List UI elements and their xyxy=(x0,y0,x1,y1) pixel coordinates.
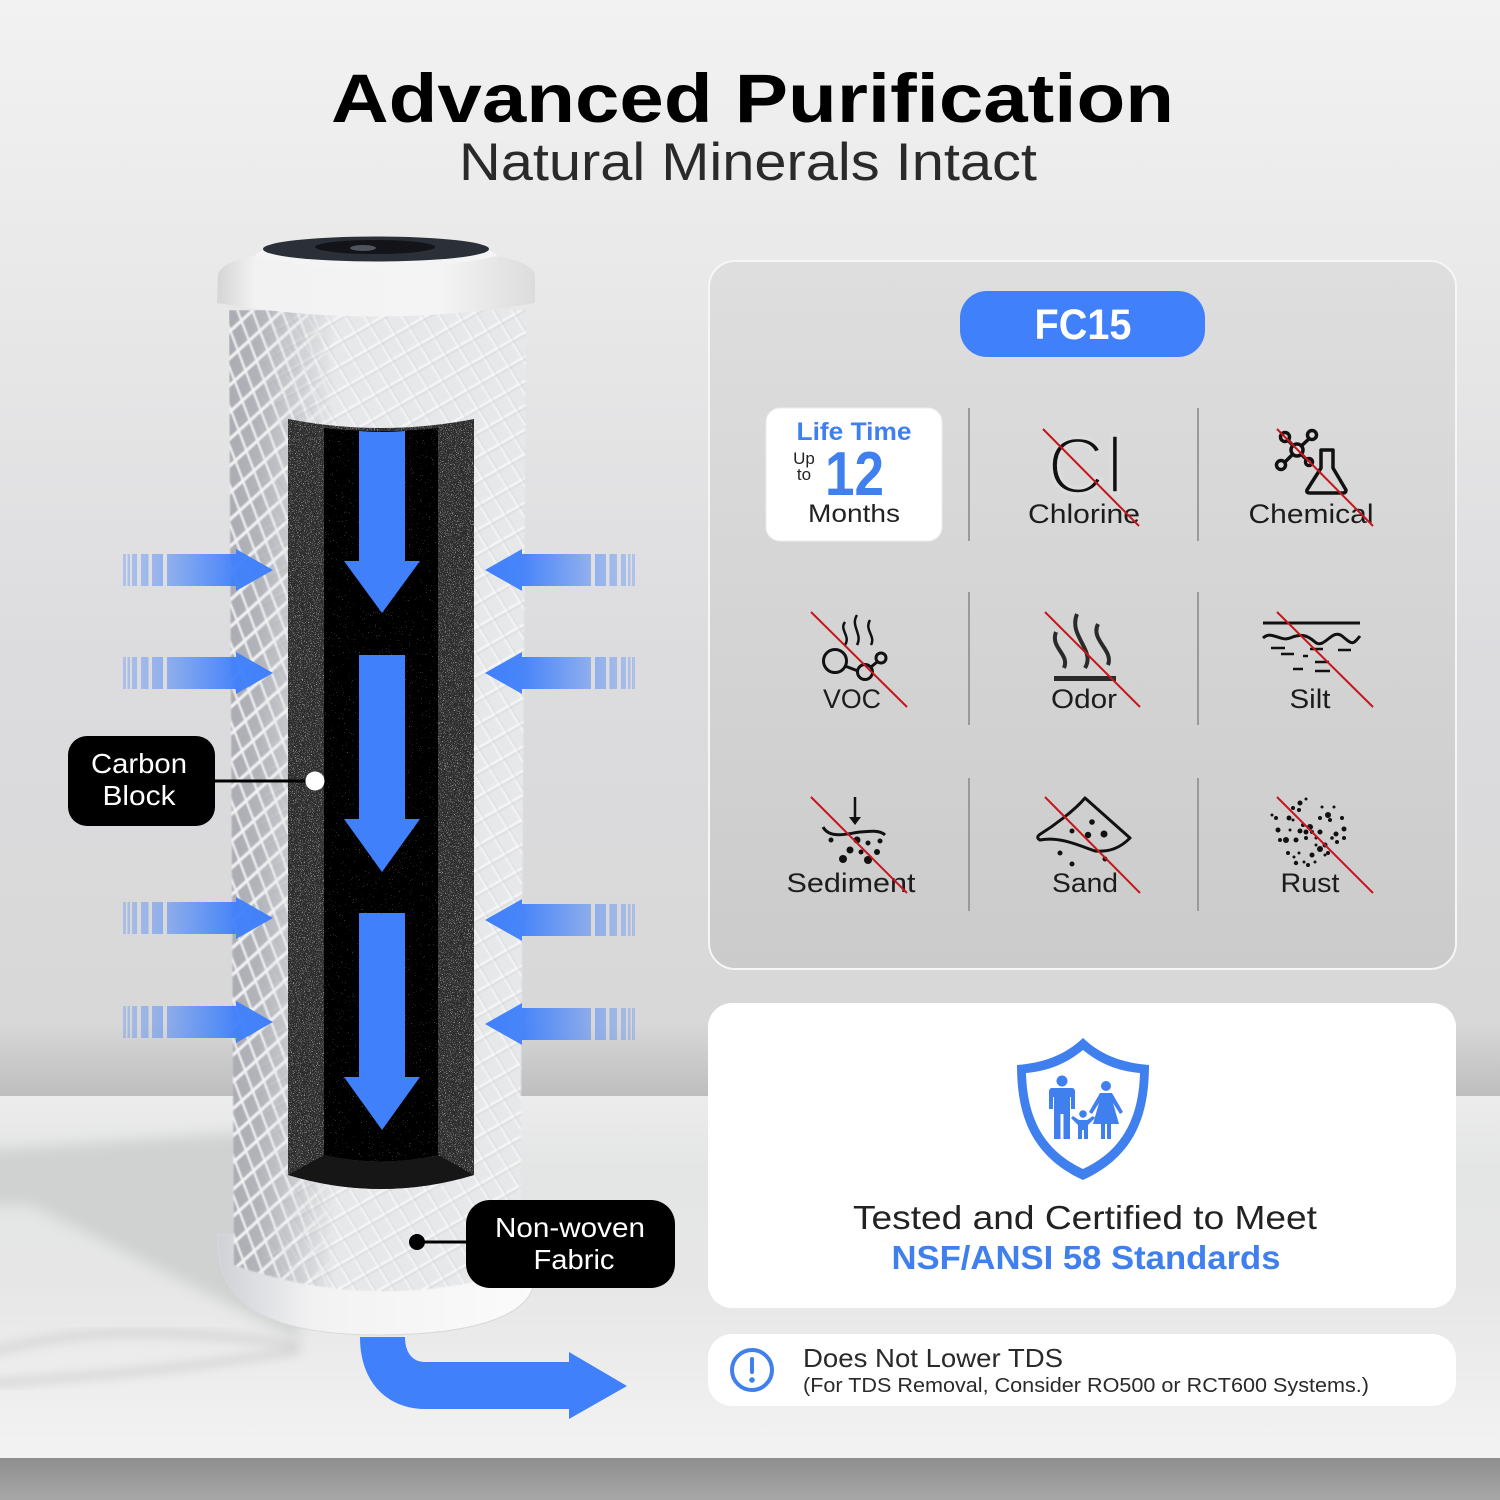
note: TDS xyxy=(708,1334,1456,1406)
item: rust xyxy=(1270,797,1373,898)
note: TDS: Does Not Lower TDS xyxy=(803,1343,1063,1373)
cross section: carbon block xyxy=(288,419,474,1189)
carbon mesh body xyxy=(229,310,526,1291)
item: sand: Sand xyxy=(1052,868,1118,898)
badge: FC15 xyxy=(960,291,1205,357)
callout: carbon block: Carbon xyxy=(91,748,187,779)
panel: certification xyxy=(708,1003,1456,1308)
item: chemical: Chemical xyxy=(1248,499,1374,529)
card: life time: Months xyxy=(808,500,900,528)
item: chlorine xyxy=(1028,421,1140,529)
item: odor xyxy=(1045,612,1140,714)
background: marble table xyxy=(0,1096,1500,1500)
certification text: Tested and Certified to Meet xyxy=(853,1199,1317,1236)
item: sediment xyxy=(786,797,916,898)
callout: carbon block xyxy=(68,736,324,826)
card: life time: 12 xyxy=(825,440,884,509)
item: sand xyxy=(1038,797,1140,898)
panel: FC15 filtration xyxy=(709,261,1456,969)
callout: carbon block: Block xyxy=(102,780,177,811)
title: Advanced Purification xyxy=(331,60,1174,137)
inflow arrows left xyxy=(123,549,273,1043)
card: life time xyxy=(766,408,942,541)
callout: non-woven fabric: Fabric xyxy=(534,1244,614,1275)
callout: non-woven fabric: Non-woven xyxy=(495,1212,645,1243)
item: chlorine: l xyxy=(1106,421,1124,510)
card: life time: to xyxy=(797,465,811,484)
card: life time: Up xyxy=(793,449,815,468)
item: silt: Silt xyxy=(1290,684,1331,714)
item: chemical xyxy=(1248,429,1374,529)
background: wall xyxy=(0,0,1500,1100)
panel: certification: NSF/ANSI 58 Standards xyxy=(892,1239,1280,1276)
badge: FC15: FC15 xyxy=(1034,301,1132,349)
top cap xyxy=(217,236,535,316)
filter cartridge xyxy=(217,236,535,1335)
callout: non-woven fabric xyxy=(409,1200,675,1288)
item: VOC xyxy=(811,612,907,714)
item: sediment: Sediment xyxy=(786,868,916,898)
note: TDS: (For TDS Removal, Consider RO500 or RCT600 Systems.) xyxy=(803,1375,1369,1397)
bottom cap xyxy=(218,1235,534,1335)
icon: shield with family xyxy=(1017,1038,1149,1180)
card: life time: Life Time xyxy=(796,418,912,446)
item: chlorine: C xyxy=(1047,421,1105,510)
dividers xyxy=(969,408,1198,911)
item: rust: Rust xyxy=(1280,868,1340,898)
outflow arrow xyxy=(360,1337,627,1419)
item: chlorine: Chlorine xyxy=(1028,499,1140,529)
vertical flow arrows xyxy=(344,431,420,1130)
item: silt xyxy=(1263,612,1373,714)
subtitle: Natural Minerals Intact xyxy=(459,133,1037,192)
icon: exclamation xyxy=(732,1350,772,1390)
item: VOC: VOC xyxy=(823,684,881,714)
inflow arrows right xyxy=(485,549,635,1045)
item: odor: Odor xyxy=(1051,684,1117,714)
